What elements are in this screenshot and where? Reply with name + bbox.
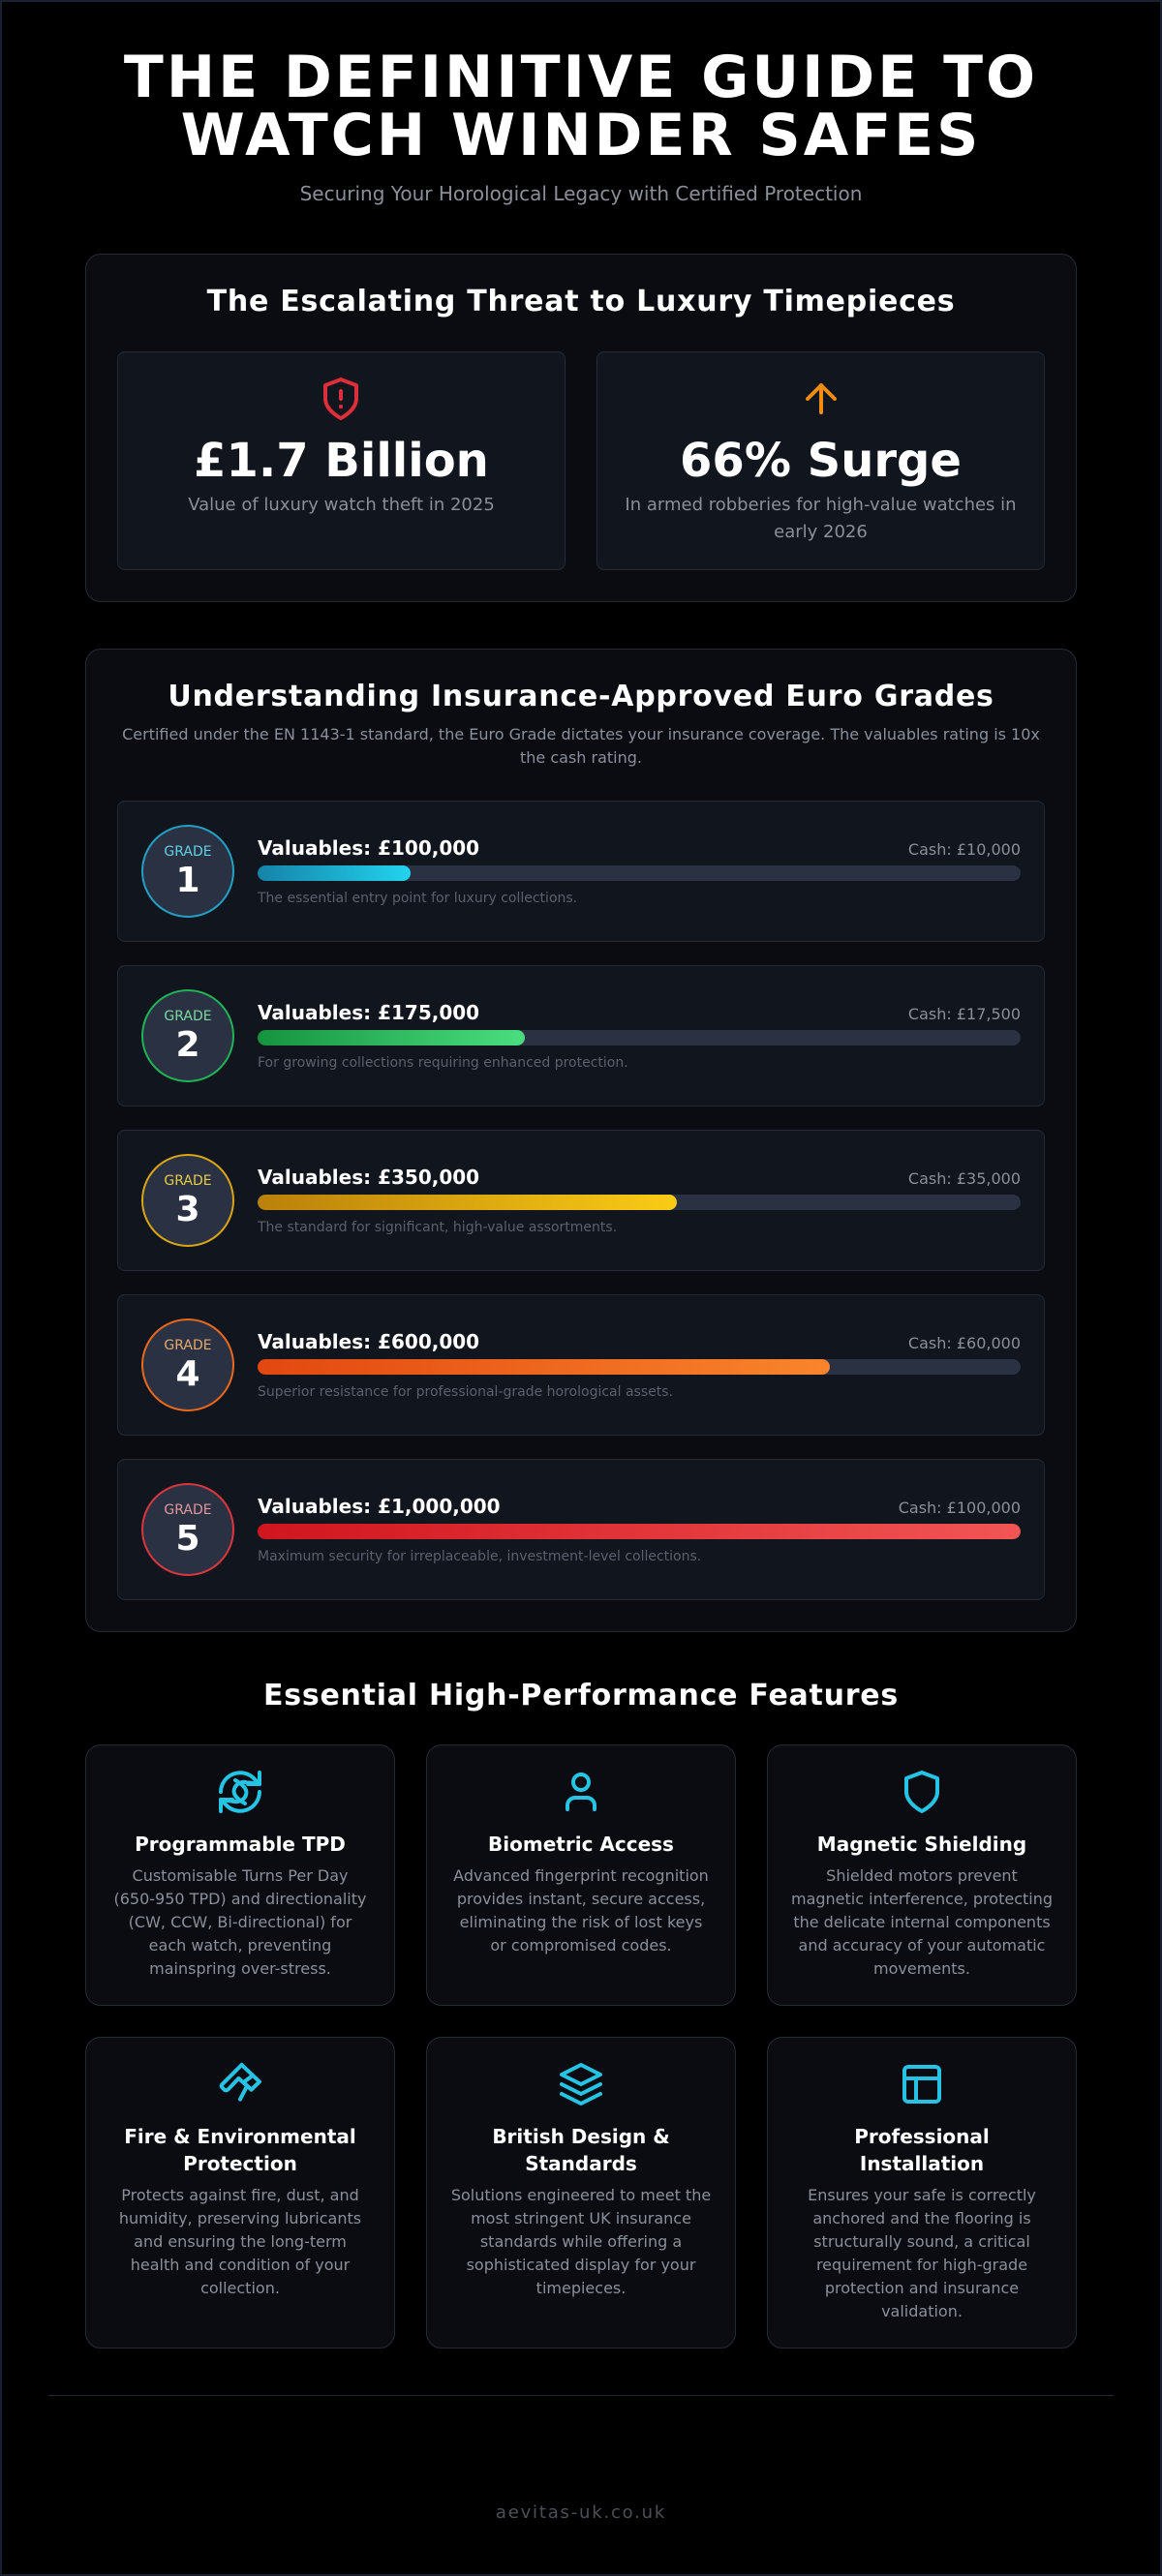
grade badge: GRADE (164, 1009, 212, 1024)
grade 5 row (117, 1459, 1045, 1600)
stat value: 66% Surge (680, 434, 962, 488)
grades intro text: Certified under the EN 1143-1 standard, the Euro Grade dictates your insurance coverage. The valuables rating is 10x (122, 725, 1040, 743)
capacity bar (258, 1195, 1021, 1210)
grade 1 row (117, 801, 1045, 942)
title: WATCH WINDER SAFES (181, 102, 981, 169)
feature card: professional installation (767, 2037, 1077, 2349)
feature title: British Design & (492, 2125, 670, 2148)
feature description: requirement for high-grade (816, 2256, 1027, 2274)
capacity bar (258, 1359, 1021, 1375)
icon: user (566, 1773, 596, 1811)
panel: threat (85, 254, 1077, 602)
feature description: humidity, preserving lubricants (119, 2209, 361, 2227)
grade description: Superior resistance for professional-grade horological assets. (258, 1384, 673, 1400)
grade description: The essential entry point for luxury collections. (258, 891, 577, 906)
feature title: Professional (854, 2125, 990, 2148)
grade badge: GRADE (164, 1173, 212, 1189)
icon: layers (560, 2063, 602, 2106)
icon: layout (902, 2065, 941, 2104)
feature title: Fire & Environmental (124, 2125, 356, 2148)
feature title: Standards (525, 2152, 637, 2175)
feature description (451, 2186, 711, 2297)
grade description: Maximum security for irreplaceable, investment-level collections. (258, 1549, 701, 1564)
grade badge: GRADE (164, 1502, 212, 1518)
feature description: or compromised codes. (490, 1936, 672, 1955)
grade badge (141, 1318, 234, 1411)
grade 3 row (117, 1130, 1045, 1271)
feature card: programmable TPD (85, 1744, 395, 2006)
grade 4 row (117, 1294, 1045, 1436)
feature description: Ensures your safe is correctly (808, 2186, 1036, 2204)
stat card: theft value (117, 351, 566, 570)
feature description: magnetic interference, protecting (791, 1890, 1053, 1908)
feature description: each watch, preventing (149, 1936, 331, 1955)
feature description: anchored and the flooring is (812, 2209, 1031, 2227)
title: THE DEFINITIVE GUIDE TO (124, 44, 1038, 111)
grade badge: 1 (175, 861, 200, 900)
feature description (808, 2186, 1036, 2320)
feature description: structurally sound, a critical (813, 2232, 1030, 2251)
grade badge: 4 (175, 1354, 200, 1394)
icon: arrow up (806, 383, 837, 414)
grade 2 row (117, 965, 1045, 1106)
feature description: eliminating the risk of lost keys (460, 1913, 702, 1931)
grade description: The standard for significant, high-value assortments. (258, 1220, 617, 1235)
grades intro text (122, 725, 1040, 767)
cash amount: Cash: £100,000 (899, 1499, 1021, 1517)
stat value: £1.7 Billion (194, 434, 489, 488)
feature description (119, 2186, 361, 2297)
feature card: biometric access (426, 1744, 736, 2006)
feature description: sophisticated display for your (467, 2256, 695, 2274)
feature description: (CW, CCW, Bi-directional) for (129, 1913, 352, 1931)
icon: rotating arrows (219, 1771, 261, 1813)
icon: shield alert (323, 378, 358, 420)
feature title (124, 2125, 356, 2175)
cash amount: Cash: £35,000 (908, 1169, 1021, 1188)
capacity bar (258, 865, 1021, 881)
feature description: Customisable Turns Per Day (133, 1866, 348, 1885)
feature description: collection. (200, 2279, 280, 2297)
grade badge (141, 1154, 234, 1247)
capacity bar (258, 1524, 1021, 1539)
feature card: british design (426, 2037, 736, 2349)
feature description: (650-950 TPD) and directionality (114, 1890, 366, 1908)
grade description: For growing collections requiring enhanced protection. (258, 1055, 628, 1071)
feature description: timepieces. (536, 2279, 626, 2297)
heading: features: Essential High-Performance Features (263, 1679, 899, 1712)
feature description: health and condition of your (131, 2256, 350, 2274)
grades intro text: the cash rating. (520, 748, 642, 767)
valuables amount: Valuables: £1,000,000 (258, 1495, 501, 1518)
grade badge: GRADE (164, 1338, 212, 1353)
stat description: early 2026 (774, 522, 868, 542)
subtitle: Securing Your Horological Legacy with Certified Protection (300, 182, 862, 205)
feature description: the delicate internal components (793, 1913, 1051, 1931)
feature title: Installation (860, 2152, 984, 2175)
valuables amount: Valuables: £350,000 (258, 1166, 479, 1189)
capacity bar (258, 1030, 1021, 1046)
title (124, 44, 1038, 169)
cash amount: Cash: £17,500 (908, 1005, 1021, 1023)
stat description: In armed robberies for high-value watches in (625, 495, 1017, 515)
cash amount: Cash: £10,000 (908, 840, 1021, 859)
footer: aevitas-uk.co.uk (496, 2502, 666, 2523)
feature description: Shielded motors prevent (826, 1866, 1018, 1885)
grade badge: 5 (175, 1519, 200, 1559)
icon: hammer (219, 2062, 261, 2102)
feature description: mainspring over-stress. (149, 1959, 331, 1978)
feature description: validation. (881, 2302, 963, 2320)
feature title: Biometric Access (488, 1833, 674, 1856)
feature description: provides instant, secure access, (457, 1890, 705, 1908)
grade badge (141, 1483, 234, 1576)
valuables amount: Valuables: £175,000 (258, 1001, 479, 1024)
feature description: most stringent UK insurance (471, 2209, 691, 2227)
panel: euro grades (85, 649, 1077, 1632)
feature description: and ensuring the long-term (134, 2232, 347, 2251)
valuables amount: Valuables: £600,000 (258, 1330, 479, 1353)
stat description (625, 495, 1017, 542)
feature card: fire protection (85, 2037, 395, 2349)
feature title: Programmable TPD (135, 1833, 346, 1856)
feature description: and accuracy of your automatic (799, 1936, 1045, 1955)
feature description: Advanced fingerprint recognition (453, 1866, 709, 1885)
cash amount: Cash: £60,000 (908, 1334, 1021, 1352)
grade badge: GRADE (164, 844, 212, 860)
feature title (854, 2125, 990, 2175)
grade badge: 2 (175, 1025, 200, 1065)
icon: shield (904, 1771, 939, 1813)
feature description (114, 1866, 366, 1978)
feature description: standards while offering a (480, 2232, 682, 2251)
valuables amount: Valuables: £100,000 (258, 836, 479, 860)
feature card: magnetic shielding (767, 1744, 1077, 2006)
feature description: Solutions engineered to meet the (451, 2186, 711, 2204)
grade badge: 3 (175, 1190, 200, 1229)
feature description (791, 1866, 1053, 1978)
stat description: Value of luxury watch theft in 2025 (188, 495, 495, 515)
feature description: Protects against fire, dust, and (121, 2186, 359, 2204)
feature title (492, 2125, 670, 2175)
grade badge (141, 989, 234, 1082)
heading: euro grades: Understanding Insurance-Approved Euro Grades (168, 680, 994, 713)
grade badge (141, 825, 234, 918)
stat card: robbery surge (596, 351, 1045, 570)
feature title: Protection (183, 2152, 297, 2175)
feature title: Magnetic Shielding (817, 1833, 1026, 1856)
feature description: protection and insurance (825, 2279, 1019, 2297)
feature description: movements. (873, 1959, 970, 1978)
heading: threat: The Escalating Threat to Luxury Timepieces (207, 285, 955, 318)
feature description (453, 1866, 709, 1955)
